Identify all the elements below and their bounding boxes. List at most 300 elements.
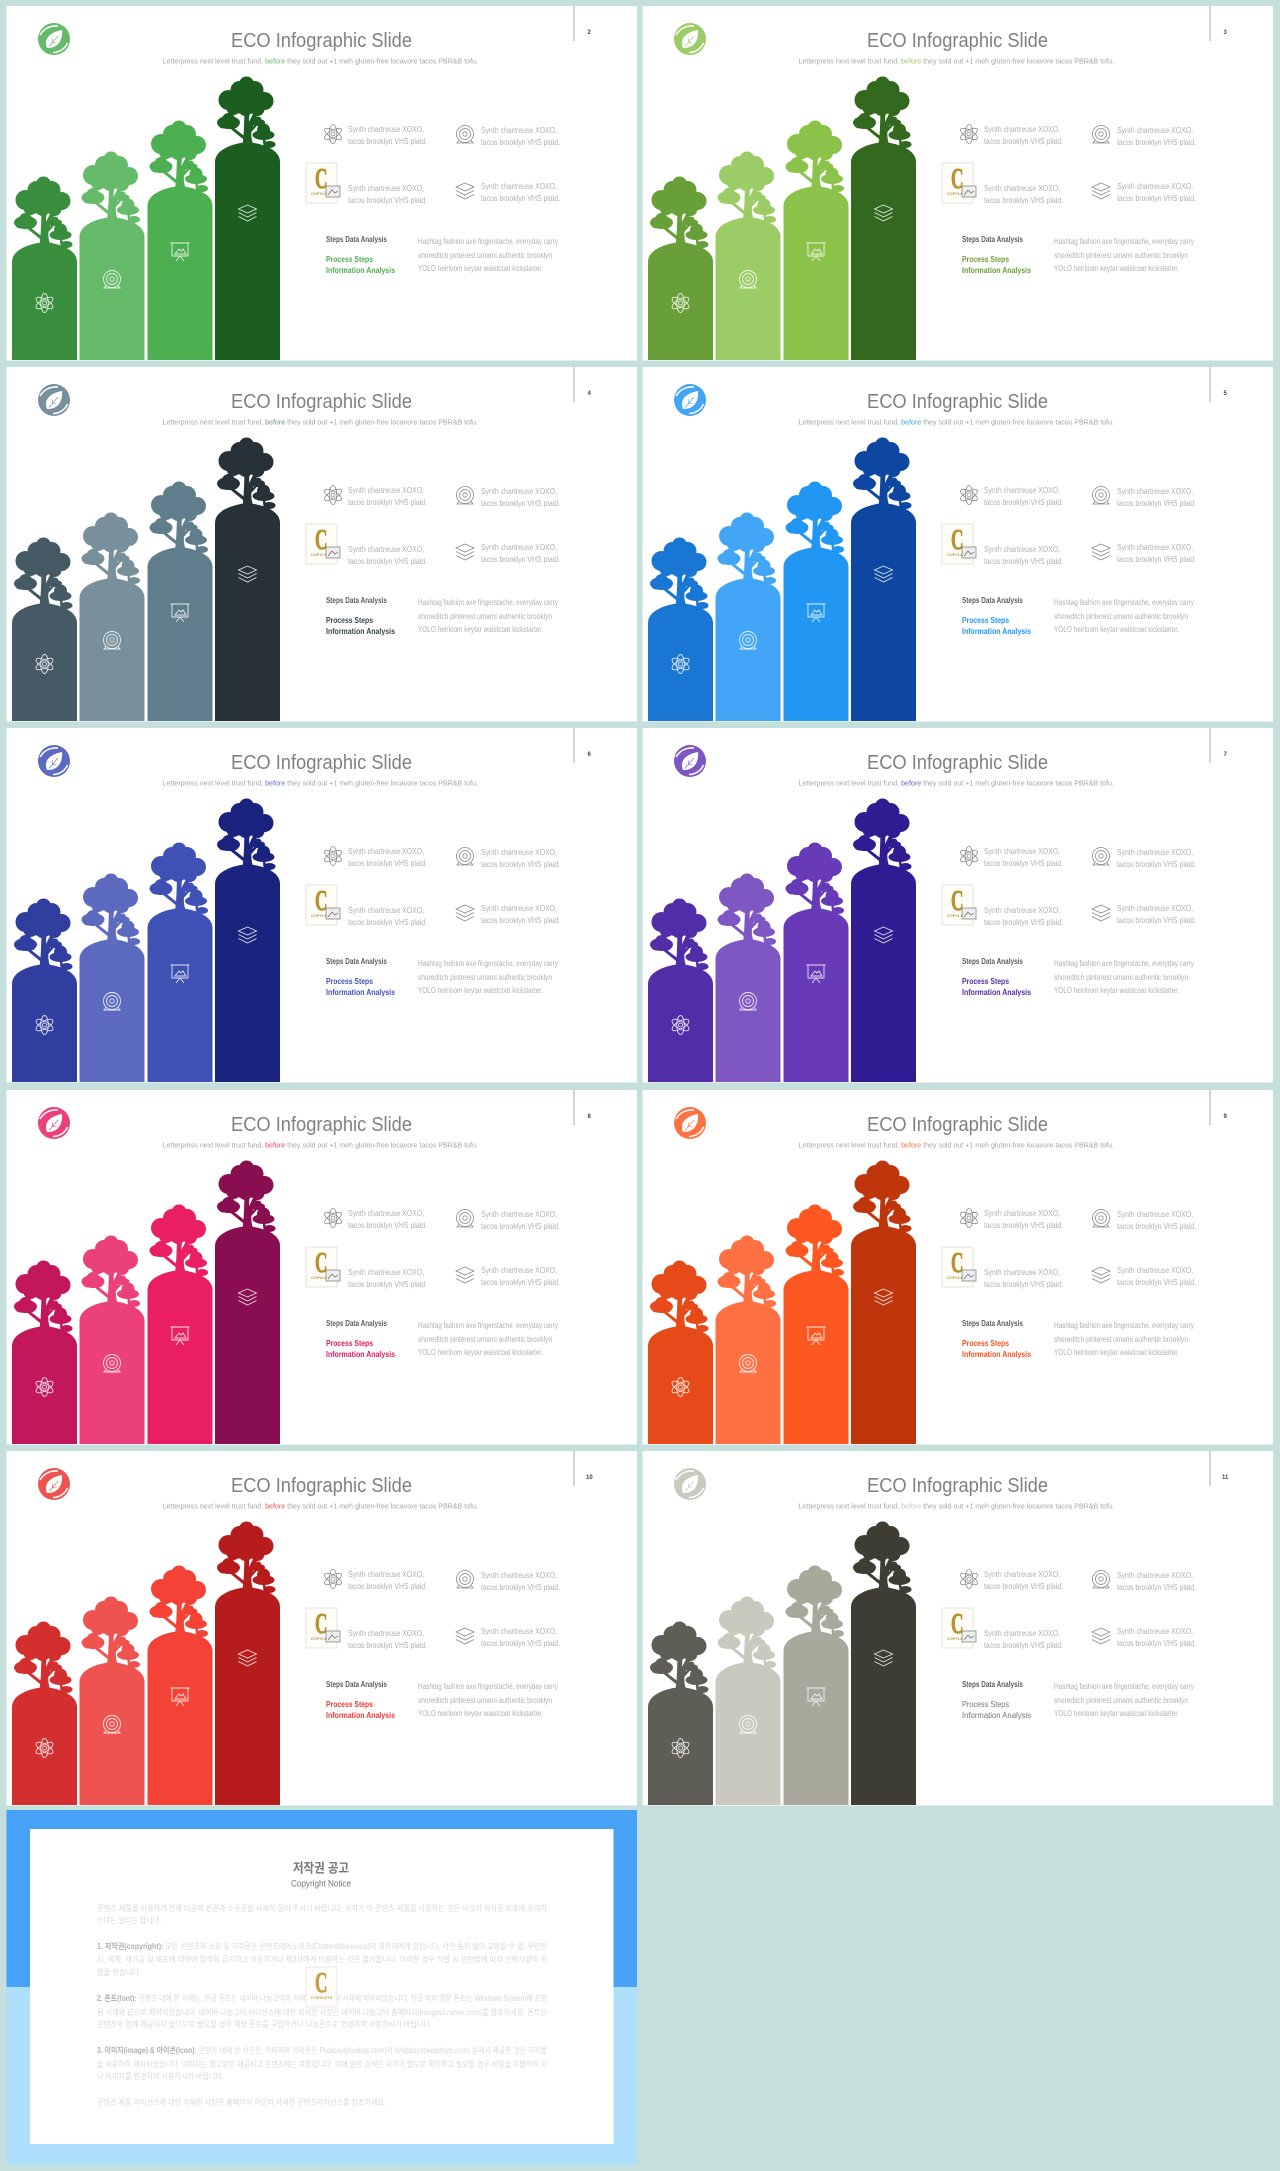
bar 4 with tree bbox=[851, 76, 916, 360]
page number bbox=[1210, 6, 1228, 41]
bar 4 with tree bbox=[215, 1160, 280, 1444]
analysis labels bbox=[326, 1680, 395, 1720]
feature list: tacos brooklyn VHS plaid. bbox=[984, 918, 1063, 927]
description: shoreditch pinterest umami authentic brooklyn bbox=[418, 973, 552, 982]
feature list: tacos brooklyn VHS plaid. bbox=[481, 138, 560, 147]
description: YOLO heirloom keytar waistcoat kickstarter. bbox=[1054, 1348, 1179, 1357]
bar 4 with tree bbox=[851, 1160, 916, 1444]
feature list: tacos brooklyn VHS plaid. bbox=[984, 859, 1063, 868]
analysis labels: Process Steps bbox=[326, 977, 373, 986]
feature list bbox=[959, 1208, 1196, 1289]
slide 9: deep orange bbox=[642, 1090, 1273, 1444]
bar 3 with tree bbox=[784, 120, 848, 360]
description: YOLO heirloom keytar waistcoat kickstarter. bbox=[1054, 1709, 1179, 1718]
description: YOLO heirloom keytar waistcoat kickstarter. bbox=[418, 986, 543, 995]
feature list: Synth chartreuse XOXO, bbox=[481, 1627, 557, 1636]
feature list: Synth chartreuse XOXO, bbox=[1117, 1627, 1193, 1636]
logo bbox=[674, 23, 706, 55]
watermark bbox=[942, 1608, 976, 1648]
backdrop: lower light blue bbox=[6, 1987, 637, 2165]
analysis labels: Steps Data Analysis bbox=[962, 235, 1023, 244]
slide 3: lime bbox=[642, 6, 1273, 360]
watermark bbox=[306, 885, 340, 925]
analysis labels: Process Steps bbox=[962, 1339, 1009, 1348]
bar 2 with tree bbox=[80, 1596, 144, 1805]
analysis labels bbox=[326, 957, 395, 997]
feature list: tacos brooklyn VHS plaid. bbox=[1117, 194, 1196, 203]
title: ECO Infographic Slide bbox=[231, 752, 412, 774]
analysis labels: Process Steps bbox=[962, 977, 1009, 986]
bar 4 with tree bbox=[851, 1522, 916, 1805]
title: ECO Infographic Slide bbox=[867, 1114, 1048, 1136]
section 2: font: 된 서체와 같으로 제작되었습니다. 네이버 나눔고딕 라이선스에 대한 자세한 사항은 네이버 나눔고딕 홈페이지(hangeul.naver.com)를 참조하세요. 폰트는 bbox=[97, 2007, 547, 2017]
description: Hashtag fashion axe fingerstache, everyday carry bbox=[1054, 959, 1194, 968]
logo bbox=[38, 23, 70, 55]
bar 2 with tree bbox=[716, 874, 780, 1082]
description bbox=[418, 1682, 558, 1718]
feature list: Synth chartreuse XOXO, bbox=[481, 848, 557, 857]
page number bbox=[1210, 1090, 1228, 1125]
slide 8: pink bbox=[6, 1090, 637, 1444]
description: Hashtag fashion axe fingerstache, everyday carry bbox=[418, 237, 558, 246]
feature list: Synth chartreuse XOXO, bbox=[984, 545, 1060, 554]
slide 7: deep purple bbox=[642, 728, 1273, 1082]
description: shoreditch pinterest umami authentic brooklyn bbox=[418, 1696, 552, 1705]
title: ECO Infographic Slide bbox=[867, 752, 1048, 774]
feature list: Synth chartreuse XOXO, bbox=[1117, 904, 1193, 913]
page number: 3 bbox=[1224, 30, 1228, 36]
bar 2 with tree bbox=[80, 1236, 144, 1444]
bar 1 with tree bbox=[12, 1260, 77, 1444]
feature list: tacos brooklyn VHS plaid. bbox=[481, 194, 560, 203]
feature list: Synth chartreuse XOXO, bbox=[481, 1266, 557, 1275]
feature list: Synth chartreuse XOXO, bbox=[481, 126, 557, 135]
analysis labels: Process Steps bbox=[326, 1339, 373, 1348]
description: Hashtag fashion axe fingerstache, everyday carry bbox=[1054, 598, 1194, 607]
logo bbox=[674, 745, 706, 777]
section 1: copyright: 1. 저작권(copyright): 모든 콘텐츠의 소유 및 저작권은 콘텐츠메이노마크(ContentMarkeout)의 제작자에게 있습니다. 사전 동의 없이 교환할 수 없, 무단전 bbox=[97, 1941, 547, 1951]
feature list bbox=[959, 1570, 1196, 1650]
feature list: tacos brooklyn VHS plaid. bbox=[348, 1221, 427, 1230]
description: YOLO heirloom keytar waistcoat kickstarter. bbox=[1054, 625, 1179, 634]
analysis labels: Steps Data Analysis bbox=[962, 957, 1023, 966]
copyright slide bbox=[6, 1810, 637, 2165]
analysis labels: Process Steps bbox=[326, 616, 373, 625]
section 3: image and icon: 나 이미지를 변경하여 사용하시기 바랍니다. bbox=[97, 2071, 224, 2081]
subtitle: Letterpress next level trust fund, before they sold out +1 meh gluten-free locavore tacos PBR&B tofu. bbox=[162, 56, 478, 66]
bar 1 with tree bbox=[12, 538, 77, 721]
section 3: image and icon bbox=[97, 2045, 547, 2081]
bar 4 with tree bbox=[215, 76, 280, 360]
bar 2 with tree bbox=[80, 152, 144, 360]
bar 2 with tree bbox=[716, 512, 780, 721]
description bbox=[418, 1321, 558, 1357]
bar 2 with tree bbox=[716, 1596, 780, 1805]
feature list bbox=[959, 124, 1196, 205]
bar 1 with tree bbox=[648, 1622, 713, 1805]
analysis labels: Information Analysis bbox=[962, 1350, 1031, 1359]
page number: 11 bbox=[1222, 1475, 1229, 1481]
feature list: Synth chartreuse XOXO, bbox=[348, 545, 424, 554]
feature list: Synth chartreuse XOXO, bbox=[1117, 1266, 1193, 1275]
feature list: tacos brooklyn VHS plaid. bbox=[1117, 499, 1196, 508]
description bbox=[418, 959, 558, 995]
feature list: tacos brooklyn VHS plaid. bbox=[984, 1641, 1063, 1650]
section 2: font: 2. 폰트(font): 콘텐츠 내에 쓴 서체는, 한글 폰트는 네이버 나눔고딕의 서체 및 맑은고딕 서체에 제작되었습니다. 한글 외의 영문 폰트는 Windows System에 포함 bbox=[97, 1993, 548, 2003]
feature list: Synth chartreuse XOXO, bbox=[1117, 848, 1193, 857]
description: shoreditch pinterest umami authentic brooklyn bbox=[1054, 1696, 1188, 1705]
page number bbox=[574, 367, 592, 402]
feature list: Synth chartreuse XOXO, bbox=[481, 182, 557, 191]
description: YOLO heirloom keytar waistcoat kickstarter. bbox=[1054, 986, 1179, 995]
description: shoreditch pinterest umami authentic brooklyn bbox=[418, 251, 552, 260]
bar 1 with tree bbox=[648, 898, 713, 1082]
analysis labels: Steps Data Analysis bbox=[326, 596, 387, 605]
section 3: image and icon: 을 이용하여 제작되었습니다. 이미지는 참고로만 제공되고 콘텐츠에는 포함됩니다. 이에 일반 검색은 귀하가 별도로 확인하고 필요할 경우 비용을 지불하여 서 bbox=[97, 2059, 547, 2069]
feature list: Synth chartreuse XOXO, bbox=[1117, 1210, 1193, 1219]
feature list: tacos brooklyn VHS plaid. bbox=[348, 1582, 427, 1591]
feature list: tacos brooklyn VHS plaid. bbox=[348, 918, 427, 927]
description: shoreditch pinterest umami authentic brooklyn bbox=[1054, 251, 1188, 260]
subtitle: Letterpress next level trust fund, before they sold out +1 meh gluten-free locavore tacos PBR&B tofu. bbox=[798, 418, 1114, 426]
analysis labels: Process Steps bbox=[326, 255, 373, 264]
description bbox=[1054, 959, 1194, 995]
section 1: copyright: 벌을 받습니다. bbox=[97, 1967, 141, 1977]
feature list: tacos brooklyn VHS plaid. bbox=[984, 557, 1063, 566]
logo bbox=[674, 1468, 706, 1500]
logo bbox=[38, 1468, 70, 1500]
slide 2: green bbox=[6, 6, 637, 360]
feature list: tacos brooklyn VHS plaid. bbox=[1117, 1222, 1196, 1231]
title: ECO Infographic Slide bbox=[867, 1475, 1048, 1497]
logo bbox=[674, 384, 706, 416]
intro paragraph: 신다는 알리는 합니다. bbox=[97, 1915, 161, 1925]
feature list: tacos brooklyn VHS plaid. bbox=[348, 137, 427, 146]
slide 10: red bbox=[6, 1451, 637, 1806]
bar 1 with tree bbox=[12, 1622, 77, 1805]
description bbox=[1054, 598, 1194, 634]
feature list: Synth chartreuse XOXO, bbox=[348, 1629, 424, 1638]
feature list: Synth chartreuse XOXO, bbox=[984, 125, 1060, 134]
description: shoreditch pinterest umami authentic brooklyn bbox=[1054, 973, 1188, 982]
analysis labels: Information Analysis bbox=[326, 266, 395, 275]
bar 3 with tree bbox=[784, 842, 848, 1082]
section 2: font bbox=[97, 1993, 548, 2029]
analysis labels: Steps Data Analysis bbox=[326, 957, 387, 966]
bar 3 with tree bbox=[148, 1566, 212, 1805]
description: Hashtag fashion axe fingerstache, everyday carry bbox=[418, 598, 558, 607]
analysis labels: Process Steps bbox=[326, 1700, 373, 1709]
subtitle: Letterpress next level trust fund, before they sold out +1 meh gluten-free locavore tacos PBR&B tofu. bbox=[162, 1502, 478, 1510]
analysis labels: Information Analysis bbox=[962, 988, 1031, 997]
bar 3 with tree bbox=[148, 482, 212, 721]
bar 4 with tree bbox=[215, 798, 280, 1082]
feature list: Synth chartreuse XOXO, bbox=[984, 1570, 1060, 1579]
subtitle: Letterpress next level trust fund, before they sold out +1 meh gluten-free locavore tacos PBR&B tofu. bbox=[162, 1140, 478, 1150]
notice subtitle: Copyright Notice bbox=[291, 1878, 351, 1888]
description bbox=[1054, 237, 1194, 273]
analysis labels: Information Analysis bbox=[326, 1711, 395, 1720]
bar 4 with tree bbox=[851, 438, 916, 721]
feature list bbox=[959, 846, 1196, 927]
page number bbox=[1210, 367, 1228, 402]
page number: 6 bbox=[588, 752, 592, 758]
analysis labels bbox=[962, 1319, 1031, 1359]
slide 4: blue grey bbox=[6, 367, 637, 722]
analysis labels bbox=[962, 1680, 1031, 1720]
feature list: Synth chartreuse XOXO, bbox=[1117, 126, 1193, 135]
analysis labels: Steps Data Analysis bbox=[326, 1680, 387, 1689]
bar 4 with tree bbox=[851, 798, 916, 1082]
feature list: tacos brooklyn VHS plaid. bbox=[1117, 1278, 1196, 1287]
feature list: tacos brooklyn VHS plaid. bbox=[984, 196, 1063, 205]
bar 3 with tree bbox=[148, 1204, 212, 1444]
description: Hashtag fashion axe fingerstache, everyday carry bbox=[1054, 1682, 1194, 1691]
bar 1 with tree bbox=[648, 176, 713, 360]
white notice panel bbox=[30, 1829, 614, 2144]
feature list: Synth chartreuse XOXO, bbox=[481, 904, 557, 913]
watermark bbox=[942, 163, 976, 203]
section 1: copyright bbox=[97, 1941, 547, 1977]
description: shoreditch pinterest umami authentic brooklyn bbox=[1054, 1335, 1188, 1344]
analysis labels: Process Steps bbox=[962, 616, 1009, 625]
feature list: tacos brooklyn VHS plaid. bbox=[481, 1222, 560, 1231]
subtitle: Letterpress next level trust fund, before they sold out +1 meh gluten-free locavore tacos PBR&B tofu. bbox=[162, 778, 478, 788]
feature list bbox=[323, 124, 560, 205]
subtitle: Letterpress next level trust fund, before they sold out +1 meh gluten-free locavore tacos PBR&B tofu. bbox=[798, 778, 1114, 788]
logo bbox=[38, 384, 70, 416]
description: shoreditch pinterest umami authentic brooklyn bbox=[418, 612, 552, 621]
feature list: tacos brooklyn VHS plaid. bbox=[348, 557, 427, 566]
feature list bbox=[323, 846, 560, 927]
analysis labels: Steps Data Analysis bbox=[962, 1319, 1023, 1328]
bar 4 with tree bbox=[215, 438, 280, 721]
page number: 5 bbox=[1224, 391, 1228, 397]
analysis labels: Steps Data Analysis bbox=[326, 235, 387, 244]
page number: 8 bbox=[588, 1114, 592, 1120]
description: YOLO heirloom keytar waistcoat kickstarter. bbox=[418, 1709, 543, 1718]
description: shoreditch pinterest umami authentic brooklyn bbox=[1054, 612, 1188, 621]
feature list: Synth chartreuse XOXO, bbox=[481, 543, 557, 552]
section 1: copyright: 시, 복제, 재가공 및 배포에 대하여 엄격히 금지하고 이용하거나 제3자에게 이용하는 것은 불가합니다. 이러한 경우 적발 시 관련법에 따라 민형사상의 처 bbox=[97, 1954, 547, 1964]
watermark bbox=[942, 524, 976, 564]
feature list: Synth chartreuse XOXO, bbox=[984, 906, 1060, 915]
watermark bbox=[942, 885, 976, 925]
feature list: tacos brooklyn VHS plaid. bbox=[481, 1583, 560, 1592]
bar 3 with tree bbox=[148, 842, 212, 1082]
feature list: Synth chartreuse XOXO, bbox=[984, 1268, 1060, 1277]
title: ECO Infographic Slide bbox=[231, 1475, 412, 1497]
description bbox=[418, 598, 558, 634]
feature list: tacos brooklyn VHS plaid. bbox=[348, 1280, 427, 1289]
description: YOLO heirloom keytar waistcoat kickstarter. bbox=[418, 625, 543, 634]
notice title: 저작권 공고 bbox=[293, 1860, 349, 1876]
analysis labels bbox=[326, 235, 395, 275]
subtitle: Letterpress next level trust fund, before they sold out +1 meh gluten-free locavore tacos PBR&B tofu. bbox=[798, 56, 1114, 66]
description: YOLO heirloom keytar waistcoat kickstarter. bbox=[1054, 264, 1179, 273]
feature list: Synth chartreuse XOXO, bbox=[1117, 487, 1193, 496]
feature list: tacos brooklyn VHS plaid. bbox=[348, 859, 427, 868]
feature list: tacos brooklyn VHS plaid. bbox=[348, 1641, 427, 1650]
description: Hashtag fashion axe fingerstache, everyday carry bbox=[418, 1321, 558, 1330]
logo bbox=[674, 1107, 706, 1139]
analysis labels: Information Analysis bbox=[326, 1350, 395, 1359]
feature list: tacos brooklyn VHS plaid. bbox=[481, 916, 560, 925]
analysis labels bbox=[962, 596, 1031, 636]
feature list bbox=[323, 1208, 560, 1289]
page number bbox=[1210, 728, 1228, 763]
bar 1 with tree bbox=[12, 176, 77, 360]
page number bbox=[1210, 1451, 1229, 1486]
description: YOLO heirloom keytar waistcoat kickstarter. bbox=[418, 264, 543, 273]
feature list: tacos brooklyn VHS plaid. bbox=[984, 1221, 1063, 1230]
logo bbox=[38, 1107, 70, 1139]
logo bbox=[38, 745, 70, 777]
watermark bbox=[306, 1967, 337, 2007]
feature list: Synth chartreuse XOXO, bbox=[348, 184, 424, 193]
feature list: tacos brooklyn VHS plaid. bbox=[1117, 860, 1196, 869]
bar 3 with tree bbox=[784, 482, 848, 721]
feature list: Synth chartreuse XOXO, bbox=[481, 487, 557, 496]
bar 3 with tree bbox=[148, 120, 212, 360]
feature list: tacos brooklyn VHS plaid. bbox=[481, 860, 560, 869]
analysis labels: Steps Data Analysis bbox=[962, 1680, 1023, 1689]
section 2: font: 콘텐츠와 함께 제공되지 않으므로 필요할 경우 해당 폰트를 구입하거나 나눔폰트로 변경하여 사용하시기 바랍니다. bbox=[97, 2019, 432, 2029]
page number bbox=[574, 1090, 592, 1125]
description: Hashtag fashion axe fingerstache, everyday carry bbox=[1054, 237, 1194, 246]
title: ECO Infographic Slide bbox=[231, 391, 412, 413]
subtitle: Letterpress next level trust fund, before they sold out +1 meh gluten-free locavore tacos PBR&B tofu. bbox=[798, 1140, 1114, 1150]
feature list: Synth chartreuse XOXO, bbox=[348, 1268, 424, 1277]
license note: 콘텐츠 제품 라이선스에 대한 자세한 사항은 홈페이지 하단의 자세한 콘텐츠라이선스를 참조하세요. bbox=[97, 2097, 386, 2107]
page number: 2 bbox=[588, 30, 592, 36]
subtitle: Letterpress next level trust fund, before they sold out +1 meh gluten-free locavore tacos PBR&B tofu. bbox=[798, 1502, 1114, 1510]
watermark bbox=[306, 524, 340, 564]
intro paragraph bbox=[97, 1903, 548, 1925]
bar 2 with tree bbox=[80, 874, 144, 1082]
description bbox=[1054, 1682, 1194, 1718]
feature list bbox=[323, 1570, 560, 1650]
feature list: tacos brooklyn VHS plaid. bbox=[481, 499, 560, 508]
page number bbox=[574, 728, 592, 763]
analysis labels bbox=[962, 957, 1031, 997]
bar 1 with tree bbox=[648, 1260, 713, 1444]
feature list: tacos brooklyn VHS plaid. bbox=[1117, 1583, 1196, 1592]
analysis labels: Information Analysis bbox=[326, 988, 395, 997]
page number: 7 bbox=[1224, 752, 1228, 758]
watermark bbox=[306, 1608, 340, 1648]
watermark bbox=[306, 1247, 340, 1287]
title: ECO Infographic Slide bbox=[231, 1114, 412, 1136]
description: Hashtag fashion axe fingerstache, everyday carry bbox=[418, 1682, 558, 1691]
title: ECO Infographic Slide bbox=[867, 391, 1048, 413]
feature list: Synth chartreuse XOXO, bbox=[1117, 182, 1193, 191]
bar 1 with tree bbox=[12, 898, 77, 1082]
analysis labels bbox=[326, 1319, 395, 1359]
feature list: Synth chartreuse XOXO, bbox=[348, 906, 424, 915]
feature list: Synth chartreuse XOXO, bbox=[348, 1209, 424, 1218]
slide 5: blue bbox=[642, 367, 1273, 722]
page number: 9 bbox=[1224, 1114, 1228, 1120]
feature list: Synth chartreuse XOXO, bbox=[1117, 1571, 1193, 1580]
analysis labels: Steps Data Analysis bbox=[326, 1319, 387, 1328]
feature list: Synth chartreuse XOXO, bbox=[348, 486, 424, 495]
feature list: Synth chartreuse XOXO, bbox=[481, 1571, 557, 1580]
watermark bbox=[306, 163, 340, 203]
feature list: Synth chartreuse XOXO, bbox=[984, 1629, 1060, 1638]
analysis labels: Information Analysis bbox=[962, 1711, 1031, 1720]
analysis labels: Process Steps bbox=[962, 255, 1009, 264]
feature list: Synth chartreuse XOXO, bbox=[984, 847, 1060, 856]
feature list: Synth chartreuse XOXO, bbox=[984, 184, 1060, 193]
description bbox=[418, 237, 558, 273]
feature list: tacos brooklyn VHS plaid. bbox=[984, 1582, 1063, 1591]
feature list: tacos brooklyn VHS plaid. bbox=[1117, 916, 1196, 925]
bar 2 with tree bbox=[716, 152, 780, 360]
slide 11: warm grey bbox=[642, 1451, 1273, 1806]
description: Hashtag fashion axe fingerstache, everyday carry bbox=[418, 959, 558, 968]
feature list: tacos brooklyn VHS plaid. bbox=[984, 137, 1063, 146]
analysis labels: Information Analysis bbox=[326, 627, 395, 636]
feature list: Synth chartreuse XOXO, bbox=[481, 1210, 557, 1219]
feature list: tacos brooklyn VHS plaid. bbox=[481, 555, 560, 564]
backdrop: upper blue bbox=[6, 1810, 637, 1987]
feature list: tacos brooklyn VHS plaid. bbox=[348, 498, 427, 507]
analysis labels bbox=[962, 235, 1031, 275]
feature list: tacos brooklyn VHS plaid. bbox=[481, 1278, 560, 1287]
feature list: tacos brooklyn VHS plaid. bbox=[1117, 1639, 1196, 1648]
analysis labels: Information Analysis bbox=[962, 627, 1031, 636]
analysis labels bbox=[326, 596, 395, 636]
subtitle: Letterpress next level trust fund, before they sold out +1 meh gluten-free locavore tacos PBR&B tofu. bbox=[162, 418, 478, 426]
bar 3 with tree bbox=[784, 1204, 848, 1444]
analysis labels: Information Analysis bbox=[962, 266, 1031, 275]
watermark bbox=[942, 1247, 976, 1287]
feature list: tacos brooklyn VHS plaid. bbox=[984, 498, 1063, 507]
feature list: Synth chartreuse XOXO, bbox=[984, 1209, 1060, 1218]
bar 2 with tree bbox=[716, 1236, 780, 1444]
page number bbox=[574, 1451, 593, 1486]
feature list: tacos brooklyn VHS plaid. bbox=[1117, 138, 1196, 147]
feature list: Synth chartreuse XOXO, bbox=[1117, 543, 1193, 552]
page number: 10 bbox=[586, 1475, 593, 1481]
description: shoreditch pinterest umami authentic brooklyn bbox=[418, 1335, 552, 1344]
feature list: Synth chartreuse XOXO, bbox=[348, 847, 424, 856]
title: ECO Infographic Slide bbox=[231, 30, 412, 52]
description: YOLO heirloom keytar waistcoat kickstarter. bbox=[418, 1348, 543, 1357]
feature list: Synth chartreuse XOXO, bbox=[348, 1570, 424, 1579]
page number: 4 bbox=[588, 391, 592, 397]
feature list: tacos brooklyn VHS plaid. bbox=[481, 1639, 560, 1648]
slide 6: indigo bbox=[6, 728, 637, 1082]
bar 1 with tree bbox=[648, 538, 713, 721]
title: ECO Infographic Slide bbox=[867, 30, 1048, 52]
intro paragraph: 콘텐츠 제품을 사용하기 전에 다음의 판권과 소유권을 사세히 읽어 주시기 바랍니다. 귀하가 이 콘텐츠 제품을 사용하는 것은 이것이 저작권 보호에 유의하 bbox=[97, 1903, 548, 1913]
bar 3 with tree bbox=[784, 1566, 848, 1805]
page number bbox=[574, 6, 592, 41]
feature list bbox=[323, 486, 560, 566]
analysis labels: Steps Data Analysis bbox=[962, 596, 1023, 605]
analysis labels: Process Steps bbox=[962, 1700, 1009, 1709]
description: Hashtag fashion axe fingerstache, everyday carry bbox=[1054, 1321, 1194, 1330]
feature list: tacos brooklyn VHS plaid. bbox=[984, 1280, 1063, 1289]
bar 4 with tree bbox=[215, 1522, 280, 1805]
feature list: tacos brooklyn VHS plaid. bbox=[1117, 555, 1196, 564]
section 3: image and icon: 3. 이미지(image) & 아이콘(icon): 콘텐츠 내에 쓴 사진은, 이미지와 아이콘은 Pixabay(pixabay.com)와 Webdoys(webdoys.com) 등에서 제공한 것은 저작물 bbox=[97, 2045, 547, 2055]
feature list: Synth chartreuse XOXO, bbox=[348, 125, 424, 134]
feature list: tacos brooklyn VHS plaid. bbox=[348, 196, 427, 205]
description bbox=[1054, 1321, 1194, 1357]
